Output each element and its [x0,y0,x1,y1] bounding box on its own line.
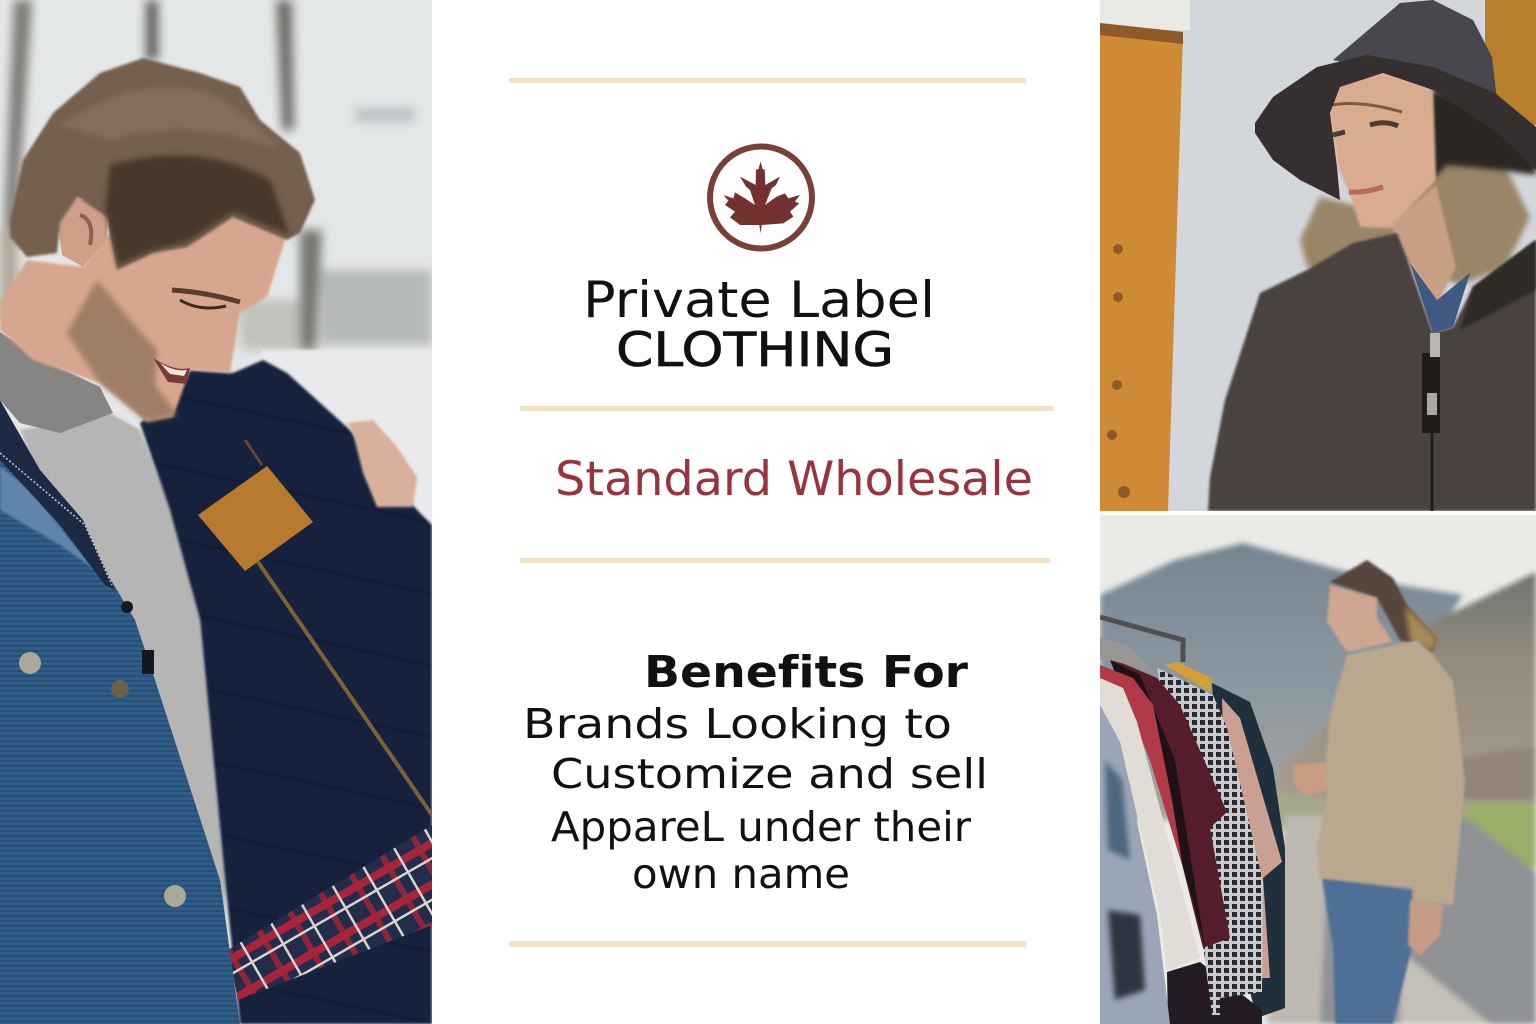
face [1330,73,1436,228]
blue jacket [0,452,240,1024]
face and neck [0,200,285,422]
subheading: Standard Wholesale: Standard Wholesale [555,452,1033,507]
text block: benefits description [523,700,988,898]
photo: woman beside clothes rack [1100,515,1536,1024]
logo: maple leaf roundel [710,146,812,248]
zipper [258,562,432,815]
text block: benefits description: AppareL under their [551,803,971,851]
divider: top [509,78,1026,83]
hat [1255,0,1536,200]
icon: maple leaf [723,162,800,233]
heading: Benefits For: Benefits For [644,647,968,698]
yellow hanger [1165,662,1212,692]
platform behind the man [262,348,326,359]
jeans [1322,878,1412,1024]
text block: benefits description: Customize and sell [551,750,988,798]
dark trousers [1167,962,1262,1024]
face [1327,585,1393,652]
tweed collar [1100,637,1153,672]
check shirt [1157,668,1263,1015]
navy coat [1212,683,1285,1018]
divider: bottom [509,941,1026,947]
ear [58,197,107,267]
text block: benefits description: own name [632,850,850,898]
neck [1390,185,1456,305]
plaid lining [228,825,432,1000]
door studs [1107,244,1130,498]
pink fleece [1222,698,1282,978]
mouth [153,358,190,384]
photo: man inspecting jacket lining [0,0,432,1024]
divider: under title [520,406,1053,411]
wooden door [1100,23,1183,511]
clothing rail [1100,617,1183,662]
plaid shirt [1100,705,1170,1024]
zipper [1430,433,1434,511]
grey sweater [20,414,226,924]
red garment [1100,665,1183,868]
shadow under the brim [1430,88,1536,180]
hair [1300,155,1530,285]
eye and brow [172,290,240,302]
jacket [1208,233,1536,511]
sweater [1317,640,1465,905]
title: CLOTHING: CLOTHING [616,323,894,378]
shirt collar [1410,263,1470,333]
divider: under subheading [520,558,1050,563]
hand [1293,762,1328,796]
title: Private Label: Private Label [583,271,935,329]
right door [1485,0,1536,125]
sweater collar [0,332,113,433]
burgundy jacket [1110,658,1230,948]
woman [1293,560,1465,1024]
white jacket [1100,678,1200,970]
text block: benefits description: Brands Looking to [523,700,952,748]
beard [67,280,178,422]
navy inner jacket [140,360,432,1024]
right hand [1408,900,1443,955]
hair [10,58,315,270]
hand [347,420,417,507]
panel: centre background [432,0,1100,1024]
photo: woman in wide-brim hat [1100,0,1536,511]
leather patch [198,466,313,571]
hair [1330,560,1437,652]
